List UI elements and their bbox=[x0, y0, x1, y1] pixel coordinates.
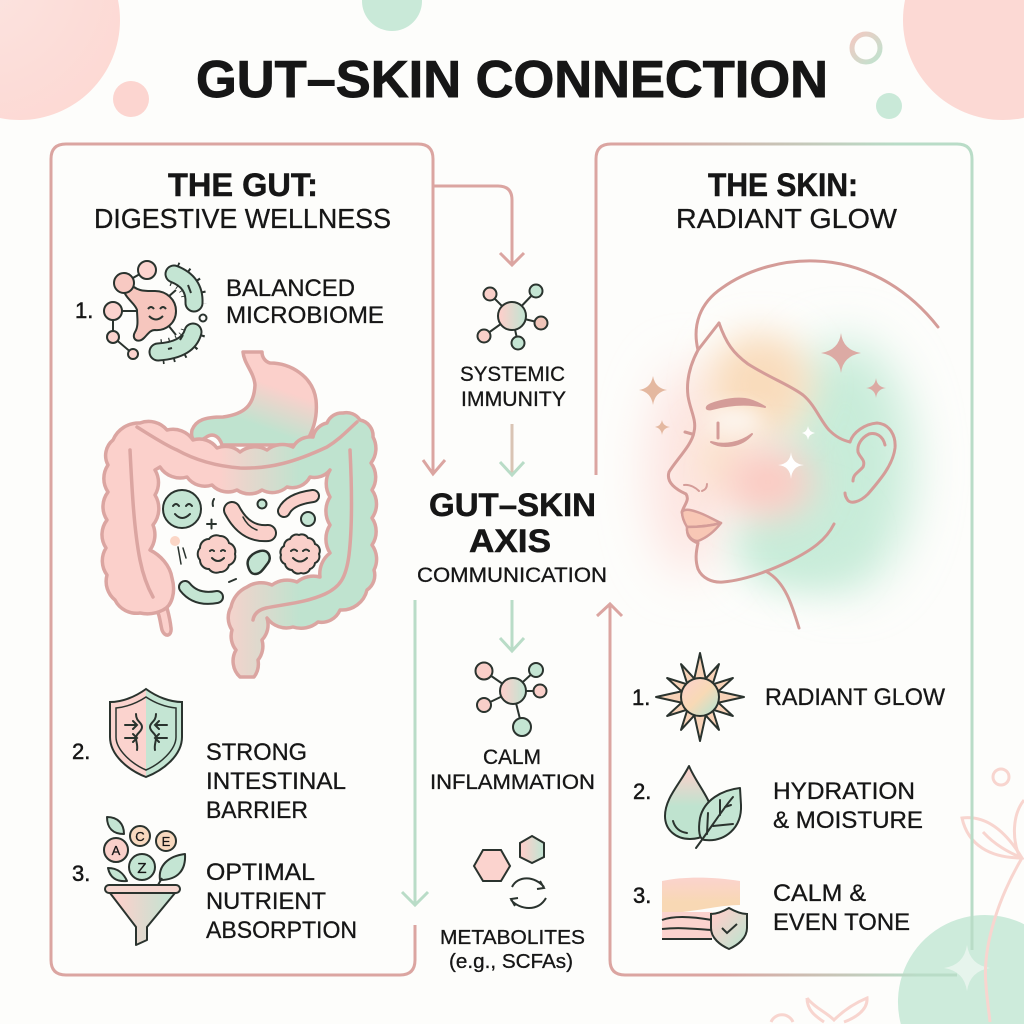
skin item 3 label: EVEN TONE bbox=[773, 909, 910, 936]
face profile bbox=[668, 323, 834, 582]
gut bacteria cluster bbox=[163, 490, 320, 598]
arrow: gut to systemic immunity bbox=[433, 186, 524, 265]
heading: the gut bbox=[94, 167, 391, 234]
pink bumpy microbes bbox=[198, 534, 320, 574]
illustration: digestive tract bbox=[102, 352, 377, 677]
center heading: gut-skin axis bbox=[417, 487, 607, 587]
eyebrow bbox=[707, 399, 765, 409]
skin item 2 number: 2. bbox=[633, 779, 651, 804]
nose bbox=[684, 484, 707, 491]
item 2 number: 2. bbox=[72, 739, 90, 764]
icon: skin layers with shield bbox=[662, 878, 747, 949]
icon: nutrient funnel: C bbox=[135, 829, 145, 844]
illustration: face glow bbox=[648, 333, 913, 590]
green beans and dots bbox=[170, 499, 315, 598]
label: metabolites: (e.g., SCFAs) bbox=[449, 951, 573, 973]
item 3 label: ABSORPTION bbox=[206, 917, 357, 944]
ear bbox=[845, 423, 895, 502]
appendix bbox=[155, 604, 171, 635]
neck bbox=[767, 572, 799, 628]
label: calm inflammation: CALM bbox=[483, 746, 541, 769]
panel: the skin frame bbox=[596, 144, 972, 975]
label: metabolites bbox=[440, 927, 585, 973]
item 2 label: INTESTINAL bbox=[206, 768, 346, 795]
item 3 number: 3. bbox=[72, 861, 90, 886]
label: calm inflammation bbox=[430, 746, 595, 794]
label: systemic immunity: SYSTEMIC bbox=[460, 363, 565, 386]
skin item 3 label: CALM & bbox=[773, 880, 866, 907]
item 2 label: BARRIER bbox=[206, 797, 308, 824]
sparkle stars bbox=[639, 333, 886, 479]
skin item 2 label: & MOISTURE bbox=[773, 807, 923, 834]
colon bbox=[102, 413, 377, 677]
icon: microbiome bbox=[104, 261, 206, 359]
icon: intestinal barrier shield bbox=[110, 689, 182, 777]
pink rod bacteria bbox=[232, 496, 313, 533]
icon: water drop and leaf bbox=[665, 766, 741, 848]
skin item 3 label bbox=[773, 880, 910, 936]
icon: nutrient funnel bbox=[104, 817, 185, 945]
icon: immune network top bbox=[478, 284, 548, 350]
center heading: gut-skin axis: GUT–SKIN bbox=[429, 487, 596, 523]
panel: the gut frame bbox=[51, 144, 445, 975]
heading: the gut: THE GUT: bbox=[168, 167, 318, 203]
skin item 2 label bbox=[773, 778, 923, 834]
lips bbox=[682, 510, 721, 527]
arrow: axis down to metabolites bbox=[402, 600, 428, 905]
label: systemic immunity: IMMUNITY bbox=[461, 388, 566, 411]
smiling green microbe bbox=[163, 490, 201, 528]
icon: nutrient funnel: A bbox=[112, 843, 121, 858]
label: metabolites: METABOLITES bbox=[440, 927, 585, 949]
arrow: axis to calm inflammation bbox=[500, 600, 524, 651]
item 1 number: 1. bbox=[75, 298, 93, 323]
illustration: face outline bbox=[668, 261, 938, 628]
center heading: gut-skin axis: AXIS bbox=[469, 523, 551, 559]
heading: the skin: RADIANT GLOW bbox=[676, 203, 898, 234]
skin item 1 number: 1. bbox=[632, 685, 650, 710]
item 1 label bbox=[226, 275, 384, 329]
item 3 label bbox=[206, 859, 357, 944]
skin item 2 label: HYDRATION bbox=[773, 778, 915, 805]
skin item 1 label: RADIANT GLOW bbox=[765, 684, 945, 711]
label: calm inflammation: INFLAMMATION bbox=[430, 771, 595, 794]
title: GUT–SKIN CONNECTION bbox=[196, 51, 828, 109]
icon: sun bbox=[656, 653, 744, 741]
heading: the skin: THE SKIN: bbox=[708, 167, 858, 203]
stomach bbox=[192, 352, 316, 445]
arrow: immunity to axis bbox=[500, 424, 524, 475]
heading: the gut: DIGESTIVE WELLNESS bbox=[94, 203, 391, 234]
label: systemic immunity bbox=[460, 363, 566, 411]
icon: nutrient funnel: E bbox=[162, 834, 171, 849]
closed eye bbox=[711, 434, 752, 446]
decorative leaf sprig bbox=[771, 769, 1024, 1022]
item 2 label: STRONG bbox=[206, 739, 307, 766]
heading: the skin bbox=[676, 167, 898, 234]
icon: metabolites hexagons bbox=[474, 836, 546, 908]
item 1 label: BALANCED bbox=[226, 275, 355, 302]
icon: nutrient funnel: Z bbox=[137, 860, 147, 877]
hair arc bbox=[696, 261, 938, 350]
item 1 label: MICROBIOME bbox=[226, 302, 384, 329]
skin item 3 number: 3. bbox=[633, 883, 651, 908]
center heading: gut-skin axis: COMMUNICATION bbox=[417, 564, 607, 587]
icon: inflammation network bbox=[476, 662, 546, 736]
item 3 label: NUTRIENT bbox=[206, 888, 326, 915]
item 3 label: OPTIMAL bbox=[206, 859, 315, 886]
hairline bbox=[719, 323, 850, 442]
item 2 label bbox=[206, 739, 346, 824]
